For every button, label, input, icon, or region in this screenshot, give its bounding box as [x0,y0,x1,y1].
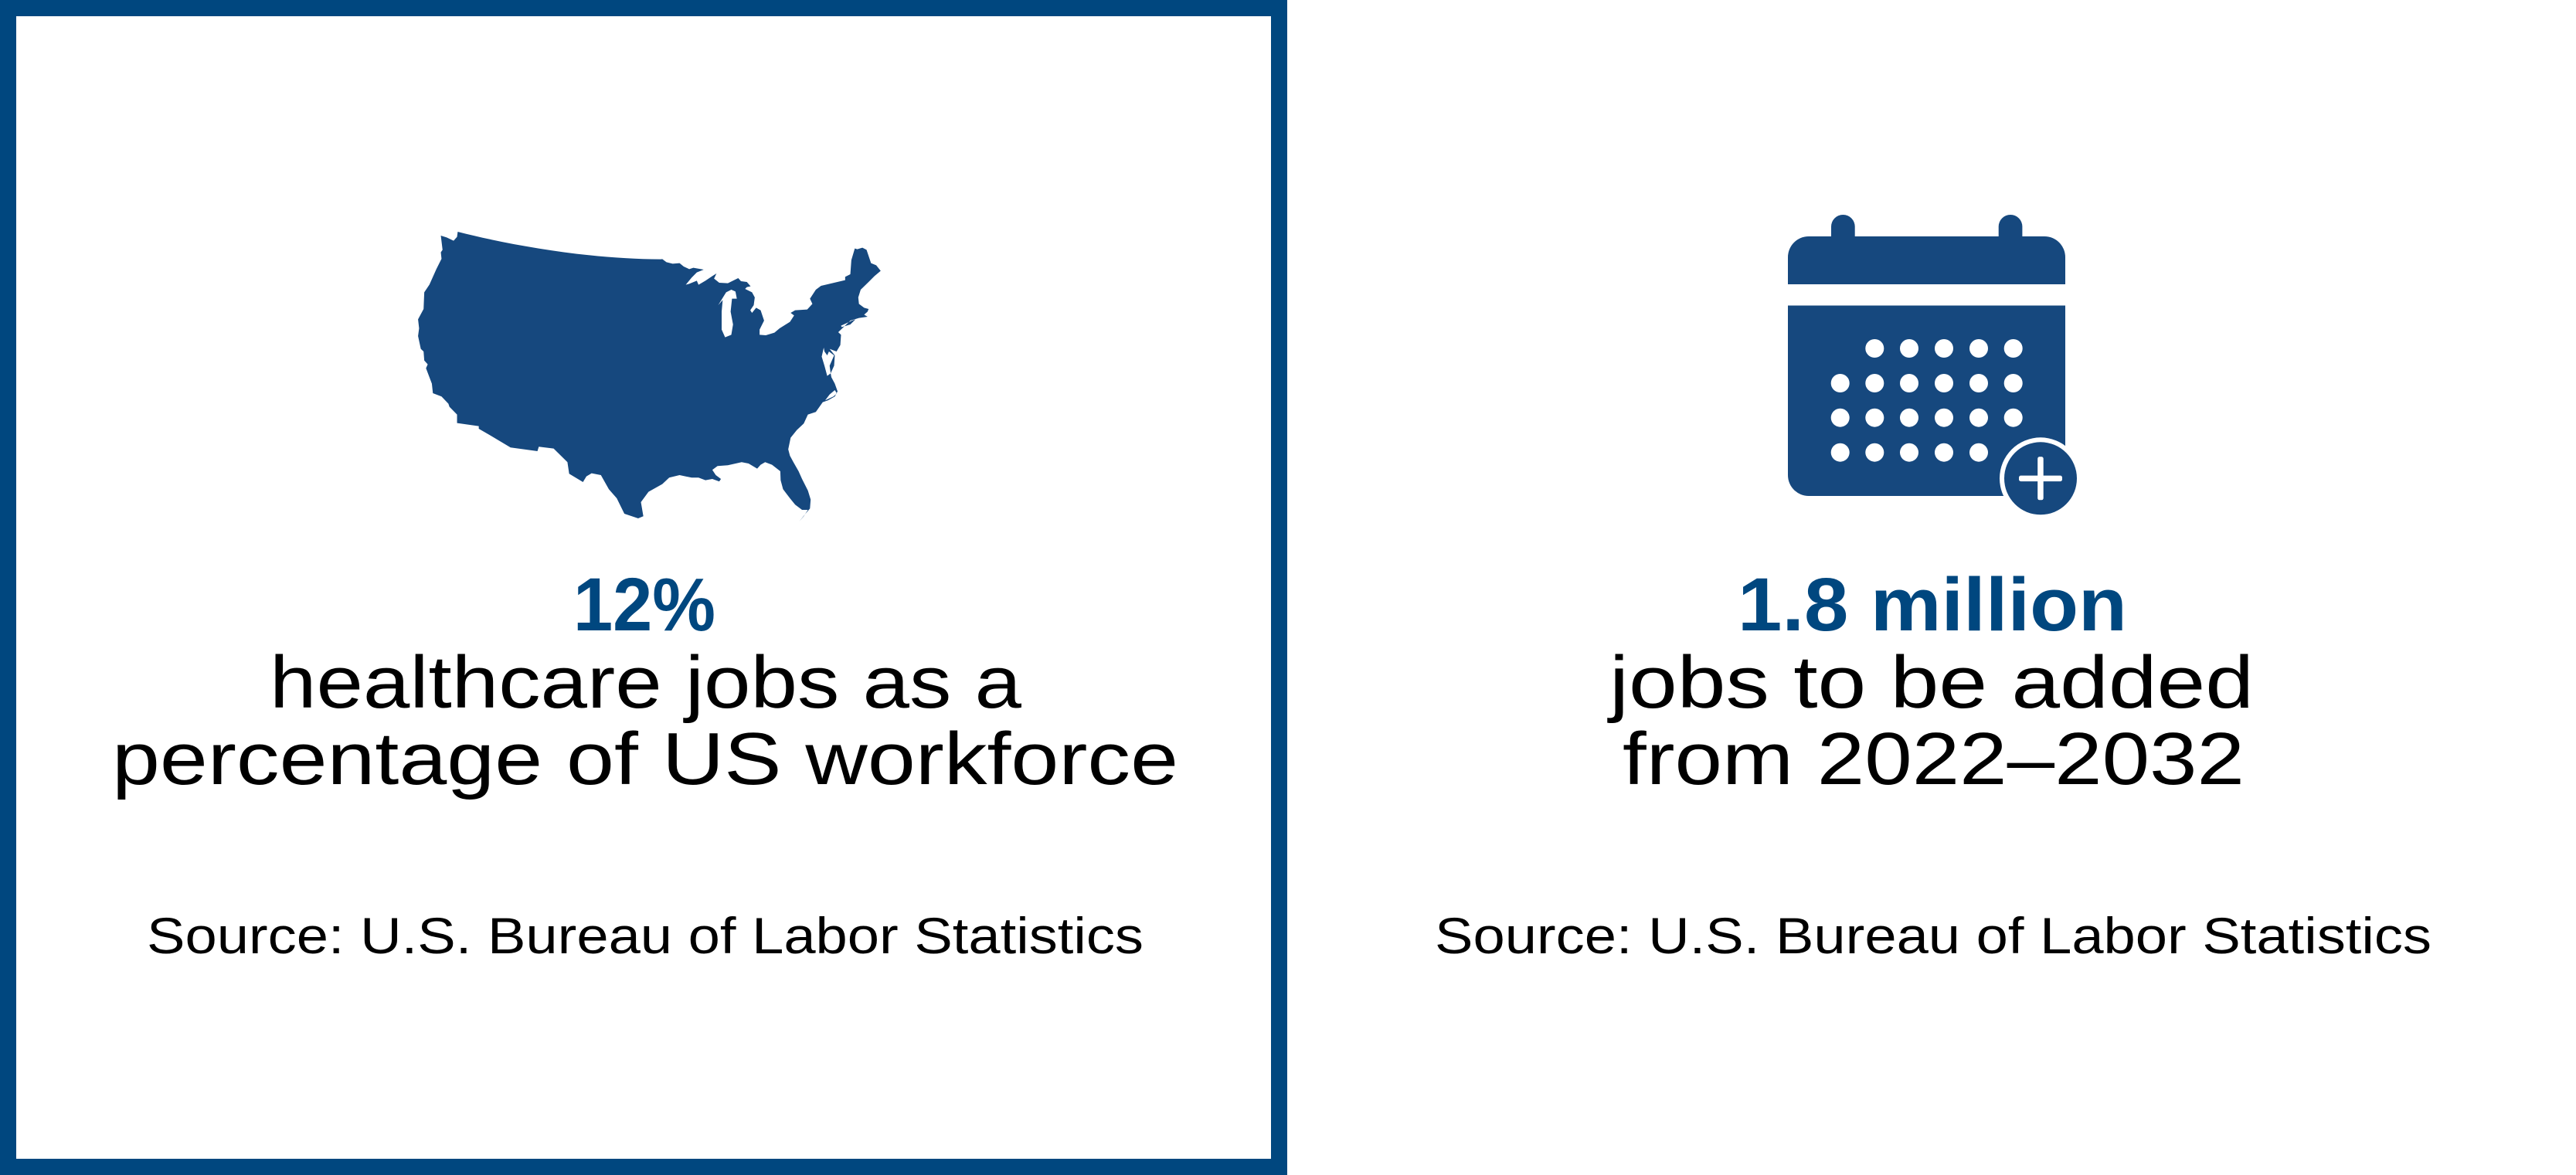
icon: calendar with plus [1788,215,2082,519]
stat: 1.8 million: 1.8 million [1738,562,2127,647]
source note: Source: U.S. Bureau of Labor Statistics [147,907,1144,964]
panel: jobs to be added [1435,215,2432,964]
label: healthcare jobs as a percentage of US workforce: percentage of US workforce [112,718,1178,800]
label: jobs to be added from 2022–2032: jobs to be added [1606,641,2254,724]
panel: healthcare share of workforce [8,8,1280,1167]
label: jobs to be added from 2022–2032 [1606,641,2254,800]
source note: Source: U.S. Bureau of Labor Statistics [1435,907,2432,964]
stat: 12%: 12% [573,562,715,647]
label: healthcare jobs as a percentage of US workforce [112,641,1178,800]
label: healthcare jobs as a percentage of US workforce: healthcare jobs as a [270,641,1022,724]
icon: US map [418,232,881,521]
panel frame [8,8,1280,1167]
label: jobs to be added from 2022–2032: from 2022–2032 [1623,718,2245,800]
